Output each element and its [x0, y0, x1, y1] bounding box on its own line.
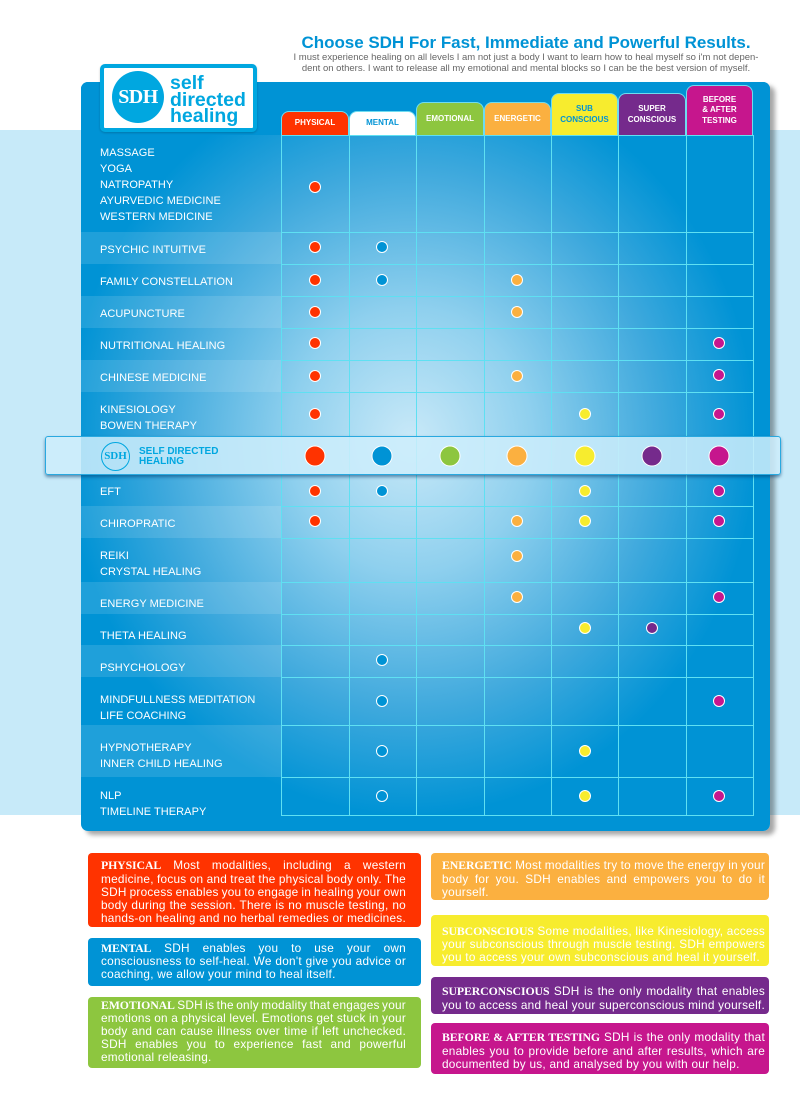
intro text: dent on others. I want to release all my emotional and mental blocks so I can be the best version of myself. [302, 63, 750, 74]
intro text [294, 52, 758, 74]
tab: before and after testing [686, 85, 753, 135]
header strip [81, 82, 770, 135]
row labels: NLP [100, 790, 122, 802]
row stripes [81, 232, 281, 264]
row labels: PSYCHIC INTUITIVE [100, 244, 206, 256]
panel: before and after testing: documented by us, and analysed by you with our help. [442, 1057, 740, 1071]
panel: emotional: body and can cause illness over time if left unchecked. [101, 1024, 406, 1038]
panel: before and after testing [431, 1023, 769, 1074]
panel: physical: medicine, focus on and treat the physical body only. The [101, 872, 406, 886]
intro text: I must experience healing on all levels I am not just a body I want to learn how to heal myself so i'm not depen- [294, 52, 758, 63]
tab: emotional: EMOTIONAL [426, 114, 474, 123]
row labels: FAMILY CONSTELLATION [100, 276, 233, 288]
panel: superconscious [431, 977, 769, 1014]
SDH badge: SDH [104, 450, 127, 462]
title: Choose SDH For Fast, Immediate and Powerful Results. [301, 33, 751, 52]
panel: before and after testing: BEFORE & AFTER TESTING SDH is the only modality that [442, 1030, 765, 1044]
tab: sub conscious [551, 93, 618, 135]
logo [100, 64, 257, 132]
panel: physical: SDH process enables you to engage in healing your own [101, 885, 406, 899]
highlight label: HEALING [139, 456, 184, 467]
tab: energetic [484, 102, 551, 135]
highlight dots [304, 446, 730, 466]
logo circle: SDH [118, 86, 158, 108]
panel: superconscious: you to access and heal your superconscious mind yourself. [442, 998, 765, 1012]
panel: emotional: SDH enables you to experience fast and powerful [101, 1037, 406, 1051]
highlight label [139, 446, 218, 467]
panel: subconscious: SUBCONSCIOUS Some modalities, like Kinesiology, access [442, 924, 765, 938]
row labels: AYURVEDIC MEDICINE [100, 195, 221, 207]
tab: sub conscious: CONSCIOUS [560, 114, 609, 124]
tab: super conscious [618, 93, 686, 135]
background band [0, 130, 800, 815]
tab: before and after testing: TESTING [702, 116, 737, 125]
tab: before and after testing: & AFTER [702, 105, 737, 114]
row labels [100, 147, 255, 818]
row labels: NATROPATHY [100, 179, 173, 191]
panel: mental: MENTAL SDH enables you to use your own [101, 941, 406, 955]
logo wordmark [170, 72, 246, 127]
row labels: REIKI [100, 550, 129, 562]
panel: mental: consciousness to self-heal. We don't give you advice or [101, 954, 406, 968]
logo circle [112, 71, 164, 123]
row labels: PSHYCHOLOGY [100, 662, 186, 674]
row labels: CHIROPRATIC [100, 518, 176, 530]
panel: physical: body during the session. There is no muscle testing, no [101, 898, 406, 912]
row labels: WESTERN MEDICINE [100, 211, 213, 223]
panel: energetic: yourself. [442, 885, 489, 899]
row labels: KINESIOLOGY [100, 404, 176, 416]
row labels: MINDFULLNESS MEDITATION [100, 694, 255, 706]
row labels: THETA HEALING [100, 630, 187, 642]
row labels: YOGA [100, 163, 132, 175]
highlight bar: self directed healing [45, 436, 781, 475]
row labels: NUTRITIONAL HEALING [100, 340, 225, 352]
panel: subconscious: your subconscious through muscle testing. SDH empowers [442, 937, 765, 951]
tab: super conscious: SUPER [638, 104, 666, 113]
panel: mental: coaching, we allow your mind to heal itself. [101, 967, 336, 981]
panel: physical: PHYSICAL Most modalities, including a western [101, 858, 406, 872]
panel: energetic: ENERGETIC Most modalities try to move the energy in your [442, 858, 765, 872]
panel: subconscious [431, 915, 769, 966]
row labels: ACUPUNCTURE [100, 308, 185, 320]
panel: energetic [431, 853, 769, 900]
logo wordmark: directed [170, 88, 246, 110]
row labels: CHINESE MEDICINE [100, 372, 207, 384]
panel: subconscious: you to access your own subconscious and heal it yourself. [442, 950, 760, 964]
row labels: CRYSTAL HEALING [100, 566, 201, 578]
panel: emotional: emotions on a physical level. Emotions get stuck in your [101, 1011, 406, 1025]
panel: physical [88, 853, 421, 927]
panel: comparison table [81, 82, 770, 831]
tab: mental: MENTAL [366, 118, 399, 127]
panel: emotional [88, 997, 421, 1068]
tab: physical [281, 111, 349, 135]
row labels: LIFE COACHING [100, 710, 186, 722]
tab: super conscious: CONSCIOUS [628, 114, 676, 124]
panel: emotional: emotional releasing. [101, 1050, 212, 1064]
SDH badge [101, 442, 130, 471]
panel: mental [88, 938, 421, 986]
tab: energetic: ENERGETIC [494, 114, 541, 123]
row labels: HYPNOTHERAPY [100, 742, 192, 754]
tab: before and after testing: BEFORE [703, 95, 736, 104]
panel: energetic: body for you. SDH enables and empowers you to do it [442, 872, 765, 886]
panel: superconscious: SUPERCONSCIOUS SDH is the only modality that enables [442, 984, 765, 998]
row labels: MASSAGE [100, 147, 155, 159]
row labels: INNER CHILD HEALING [100, 758, 223, 770]
highlight label: SELF DIRECTED [139, 446, 218, 457]
panel: before and after testing: enables you to provide before and after results, which are [442, 1044, 765, 1058]
tab: emotional [416, 102, 484, 135]
panel: emotional: EMOTIONAL SDH is the only modality that engages your [101, 998, 406, 1012]
panel: physical: hands-on healing and no herbal remedies or medicines. [101, 911, 406, 925]
tab: sub conscious: SUB [576, 104, 593, 113]
row labels: EFT [100, 486, 121, 498]
logo wordmark: self [170, 72, 204, 94]
row labels: BOWEN THERAPY [100, 420, 197, 432]
row labels: ENERGY MEDICINE [100, 598, 204, 610]
row labels: TIMELINE THERAPY [100, 806, 206, 818]
tab: physical: PHYSICAL [295, 118, 335, 127]
tab: mental [349, 111, 416, 135]
logo wordmark: healing [170, 105, 238, 127]
